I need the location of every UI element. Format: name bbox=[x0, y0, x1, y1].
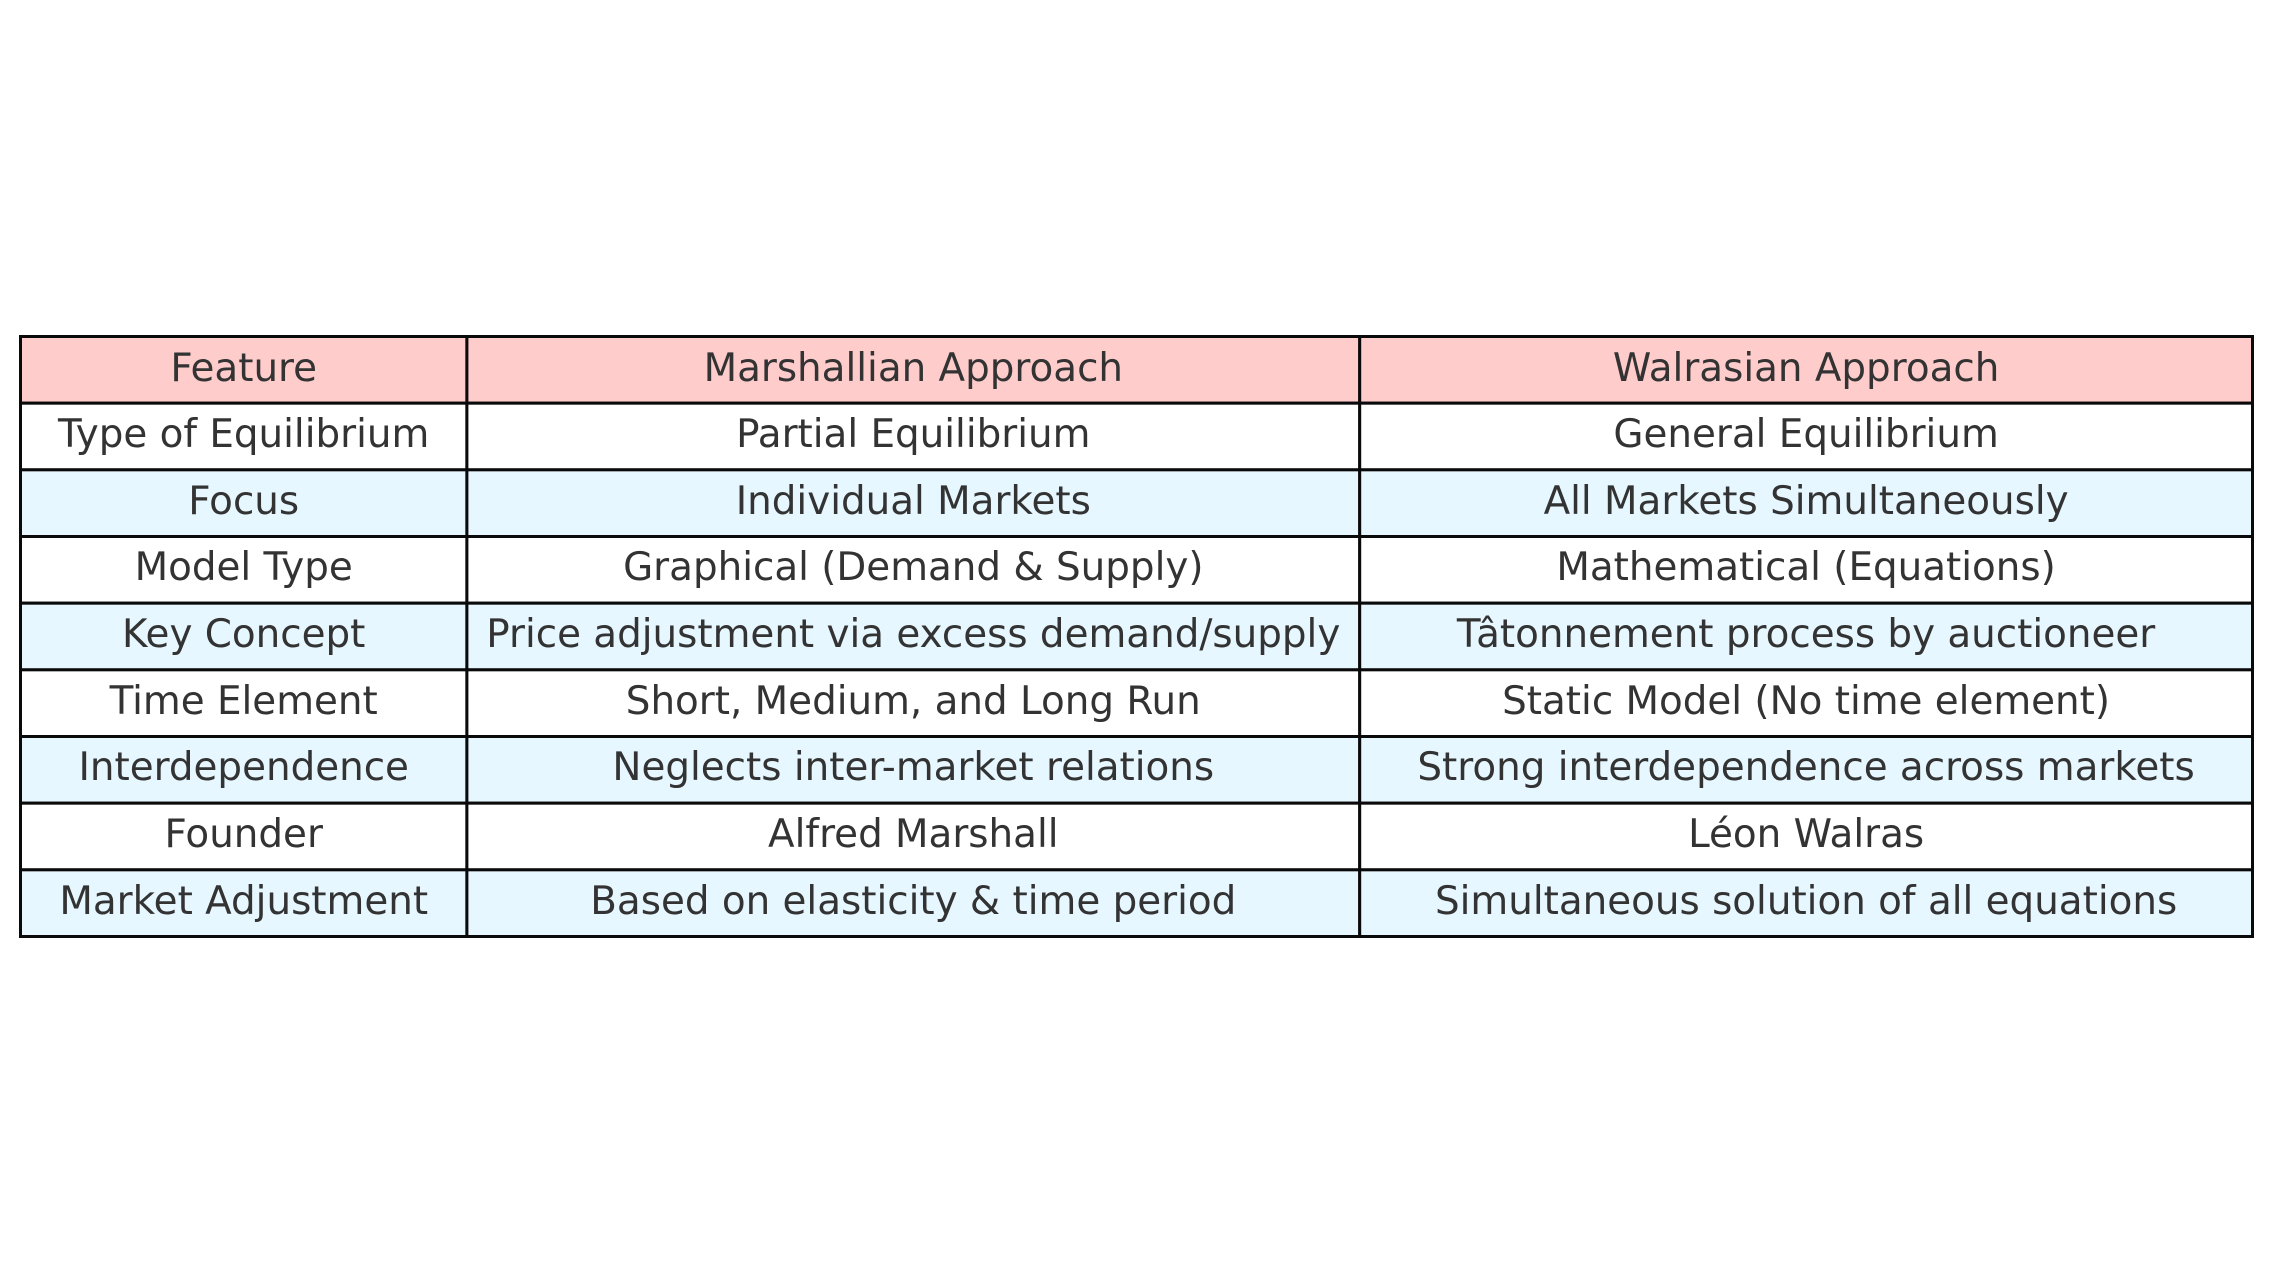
header row: Walrasian Approach bbox=[1613, 346, 1999, 391]
row: Type of Equilibrium bbox=[20, 403, 2252, 470]
row: Type of Equilibrium: Type of Equilibrium bbox=[57, 412, 429, 457]
row: Interdependence: Neglects inter-market relations bbox=[612, 745, 1214, 790]
row: Market Adjustment bbox=[20, 870, 2252, 936]
row: Model Type bbox=[20, 536, 2252, 603]
row: Type of Equilibrium: Partial Equilibrium bbox=[736, 412, 1090, 457]
row: Market Adjustment: Market Adjustment bbox=[59, 879, 428, 924]
row: Time Element: Time Element bbox=[109, 679, 378, 724]
row: Time Element bbox=[20, 670, 2252, 736]
row: Model Type: Model Type bbox=[135, 545, 353, 590]
row: Key Concept bbox=[20, 603, 2252, 670]
row: Key Concept: Tâtonnement process by auctioneer bbox=[1456, 612, 2155, 657]
header row bbox=[20, 336, 2252, 403]
row: Key Concept: Price adjustment via excess demand/supply bbox=[486, 612, 1340, 657]
row: Focus: Focus bbox=[188, 479, 299, 524]
row: Interdependence: Strong interdependence across markets bbox=[1417, 745, 2195, 790]
row: Founder: Alfred Marshall bbox=[768, 812, 1059, 857]
header row: Marshallian Approach bbox=[704, 346, 1123, 391]
row: Founder: Founder bbox=[164, 812, 323, 857]
row: Market Adjustment: Based on elasticity & time period bbox=[590, 879, 1236, 924]
row: Focus: Individual Markets bbox=[736, 479, 1091, 524]
row: Founder bbox=[20, 803, 2252, 870]
row: Interdependence bbox=[20, 736, 2252, 803]
row: Focus: All Markets Simultaneously bbox=[1544, 479, 2069, 524]
row: Focus bbox=[20, 470, 2252, 536]
row: Market Adjustment: Simultaneous solution of all equations bbox=[1435, 879, 2177, 924]
row: Interdependence: Interdependence bbox=[78, 745, 409, 790]
row: Key Concept: Key Concept bbox=[122, 612, 365, 657]
row: Founder: Léon Walras bbox=[1688, 812, 1924, 857]
row: Model Type: Graphical (Demand & Supply) bbox=[623, 545, 1204, 590]
header row: Feature bbox=[170, 346, 317, 391]
row: Model Type: Mathematical (Equations) bbox=[1556, 545, 2056, 590]
row: Type of Equilibrium: General Equilibrium bbox=[1613, 412, 1999, 457]
row: Time Element: Static Model (No time element) bbox=[1502, 679, 2110, 724]
row: Time Element: Short, Medium, and Long Run bbox=[626, 679, 1201, 724]
